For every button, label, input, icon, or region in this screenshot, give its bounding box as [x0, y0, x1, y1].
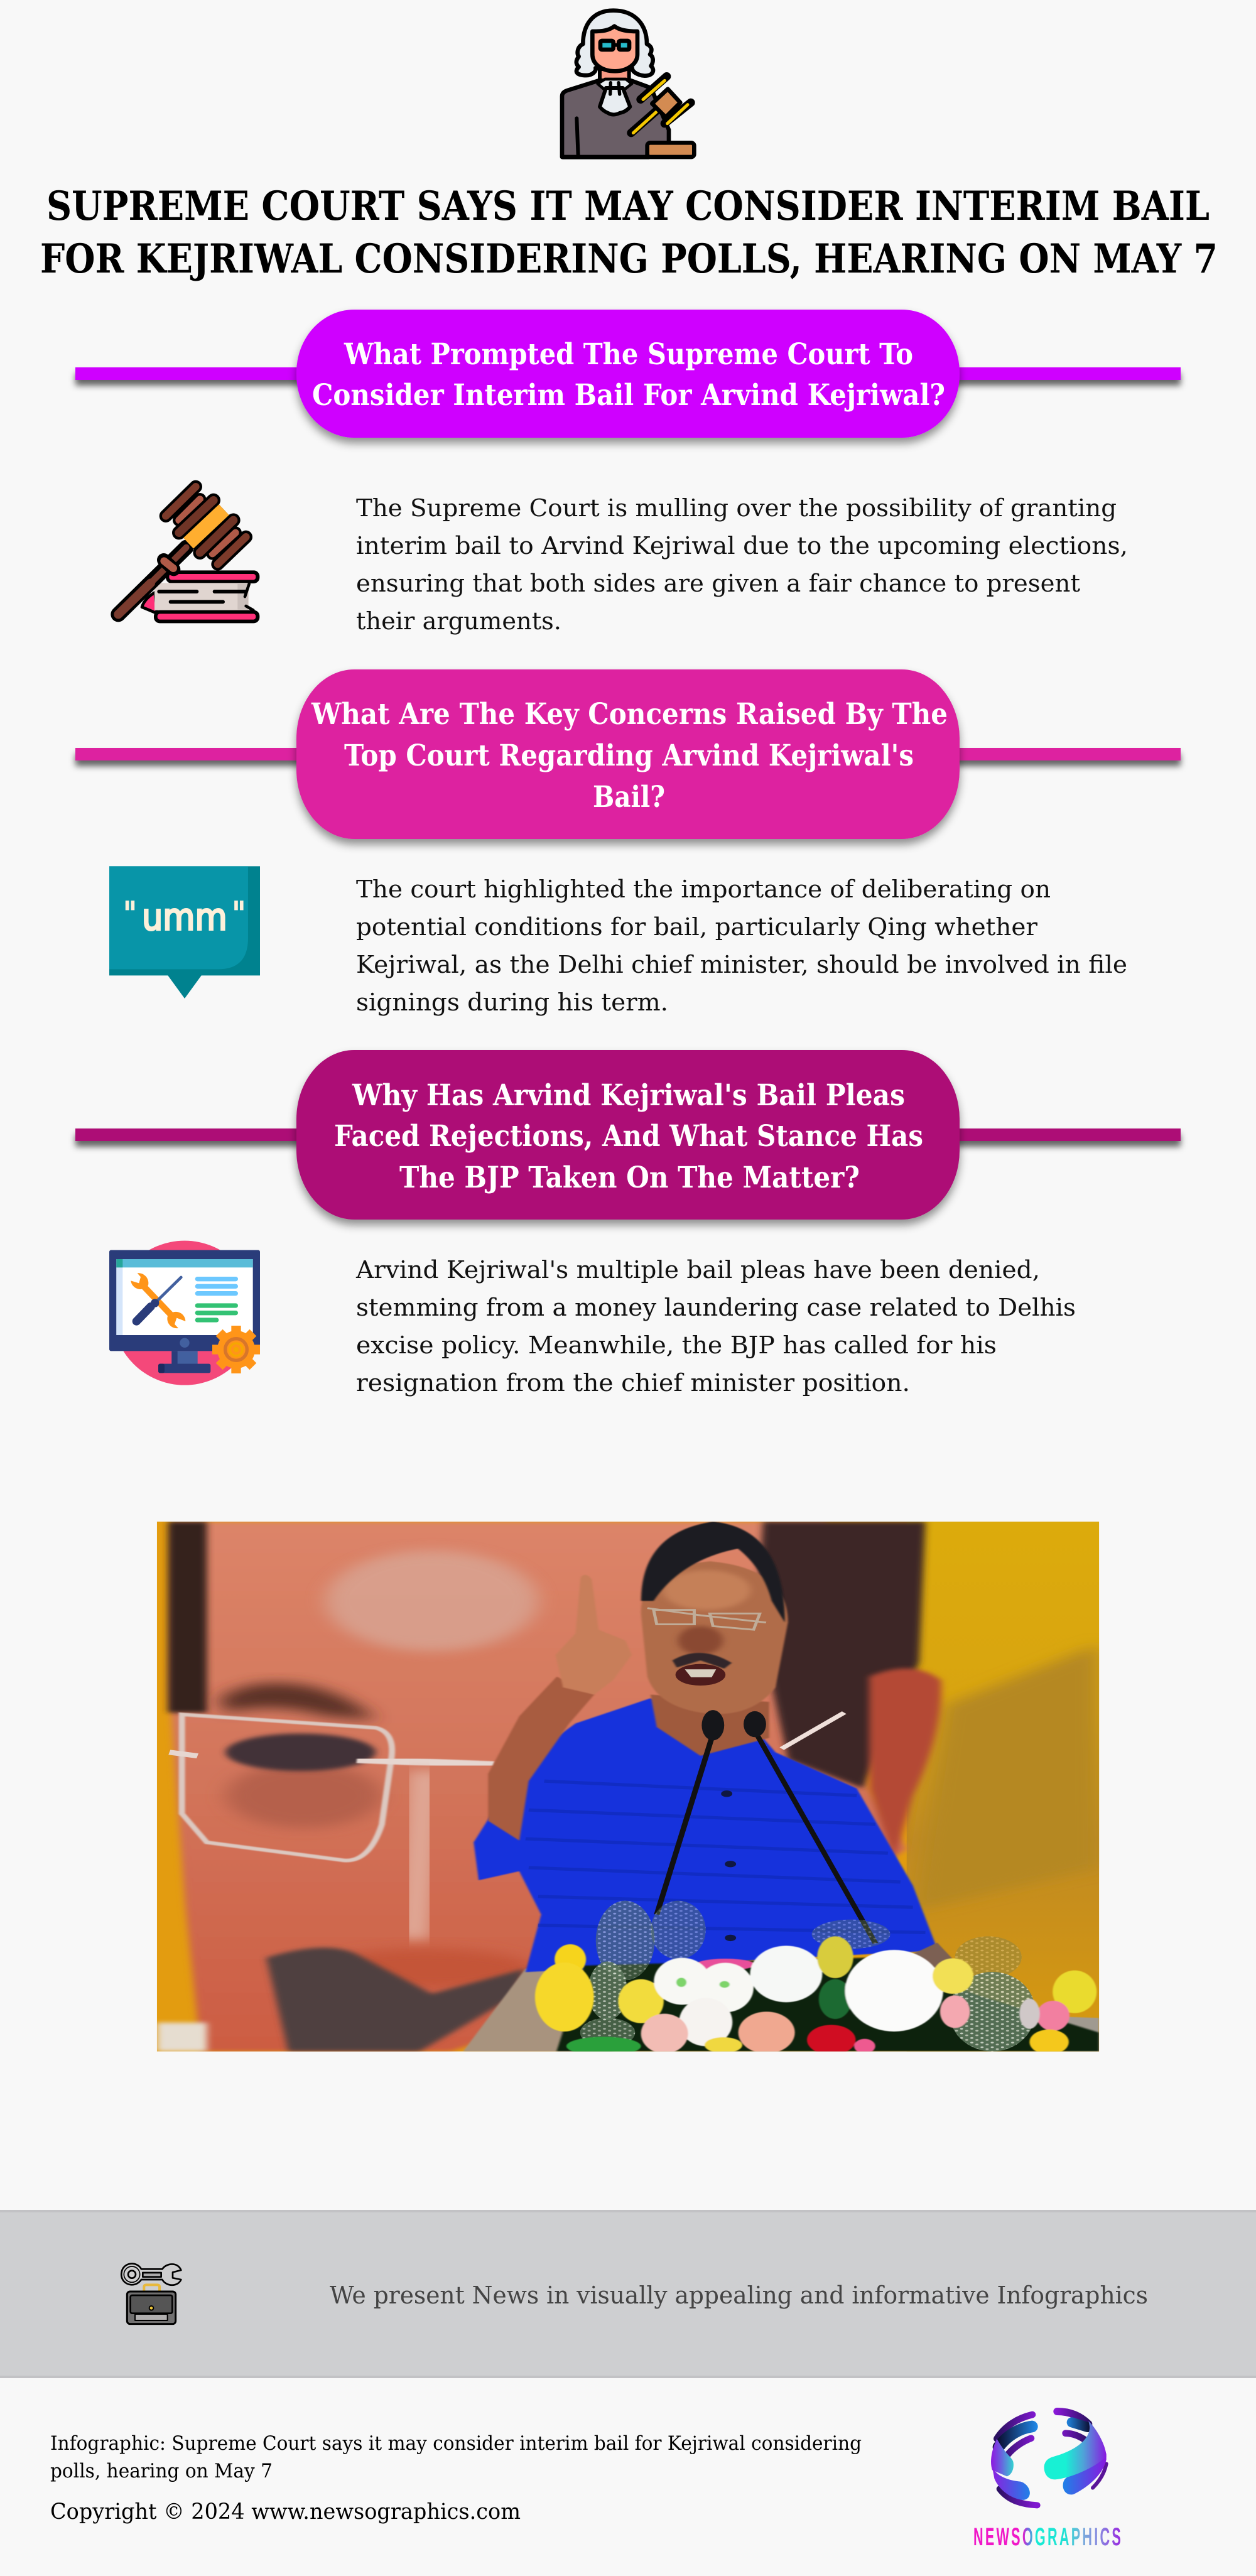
panel: section 3 heading: Faced Rejections, And What Stance Has [334, 1119, 923, 1154]
text block: section 3 body: excise policy. Meanwhile, the BJP has called for his [356, 1331, 997, 1359]
text block: section 1 body: The Supreme Court is mulling over the possibility of granting [356, 494, 1117, 522]
icon: umm speech bubble: " [232, 896, 246, 932]
text block: section 3 body: resignation from the chief minister position. [356, 1369, 910, 1397]
panel: section 1 heading [75, 310, 1181, 438]
panel: section 3 heading [75, 1050, 1181, 1220]
text block: footer caption: polls, hearing on May 7 [50, 2460, 273, 2482]
text block: section 2 body [356, 875, 1127, 1016]
text block: section 2 body: Kejriwal, as the Delhi chief minister, should be involved in file [356, 951, 1127, 978]
text block: section 2 body: potential conditions for bail, particularly Qing whether [356, 913, 1038, 941]
text block: footer caption [50, 2432, 862, 2525]
icon: judge with gavel [562, 11, 694, 158]
text block: section 3 body: Arvind Kejriwal's multiple bail pleas have been denied, [355, 1256, 1040, 1284]
text block: section 2 body: signings during his term. [356, 988, 668, 1016]
text block: footer caption: Infographic: Supreme Court says it may consider interim bail for Kejriwal considering [50, 2432, 862, 2455]
icon: umm speech bubble: " [123, 896, 137, 932]
panel: section 1 heading: Consider Interim Bail For Arvind Kejriwal? [312, 378, 945, 413]
footer band [0, 2210, 1256, 2378]
logo: Newsographics: NEWSOGRAPHICS [973, 2523, 1123, 2551]
panel: section 2 heading [75, 669, 1181, 839]
icon: gavel on book [118, 487, 259, 623]
panel: section 2 heading: What Are The Key Concerns Raised By The [311, 697, 948, 732]
panel: section 2 heading: Bail? [593, 780, 665, 814]
tagline: We present News in visually appealing and informative Infographics [330, 2281, 1148, 2309]
panel: section 1 heading: What Prompted The Supreme Court To [344, 337, 913, 372]
logo: Newsographics [973, 2411, 1123, 2551]
text block: section 1 body [356, 494, 1128, 635]
panel: section 2 heading: Top Court Regarding Arvind Kejriwal's [344, 739, 914, 773]
title [40, 183, 1218, 283]
text block: section 1 body: their arguments. [356, 607, 561, 635]
text block: section 1 body: ensuring that both sides are given a fair chance to present [356, 570, 1080, 597]
panel: section 3 heading: Why Has Arvind Kejriwal's Bail Pleas [352, 1078, 905, 1113]
photo: Kejriwal speaking at a podium [157, 1522, 1099, 2055]
text block: section 3 body [355, 1256, 1076, 1397]
icon: monitor with tools [109, 1241, 260, 1385]
text block: section 1 body: interim bail to Arvind Kejriwal due to the upcoming elections, [356, 532, 1128, 560]
text block: footer caption: Copyright © 2024 www.newsographics.com [50, 2499, 521, 2525]
photo detail: flowers on the podium [534, 1900, 1099, 2052]
text block: section 3 body: stemming from a money laundering case related to Delhis [356, 1294, 1076, 1321]
panel: section 3 heading: The BJP Taken On The Matter? [399, 1161, 860, 1195]
icon: toolbox and wrench [121, 2264, 181, 2324]
icon: umm speech bubble [109, 866, 260, 998]
icon: umm speech bubble: umm [142, 896, 227, 939]
text block: section 2 body: The court highlighted the importance of deliberating on [356, 875, 1051, 903]
